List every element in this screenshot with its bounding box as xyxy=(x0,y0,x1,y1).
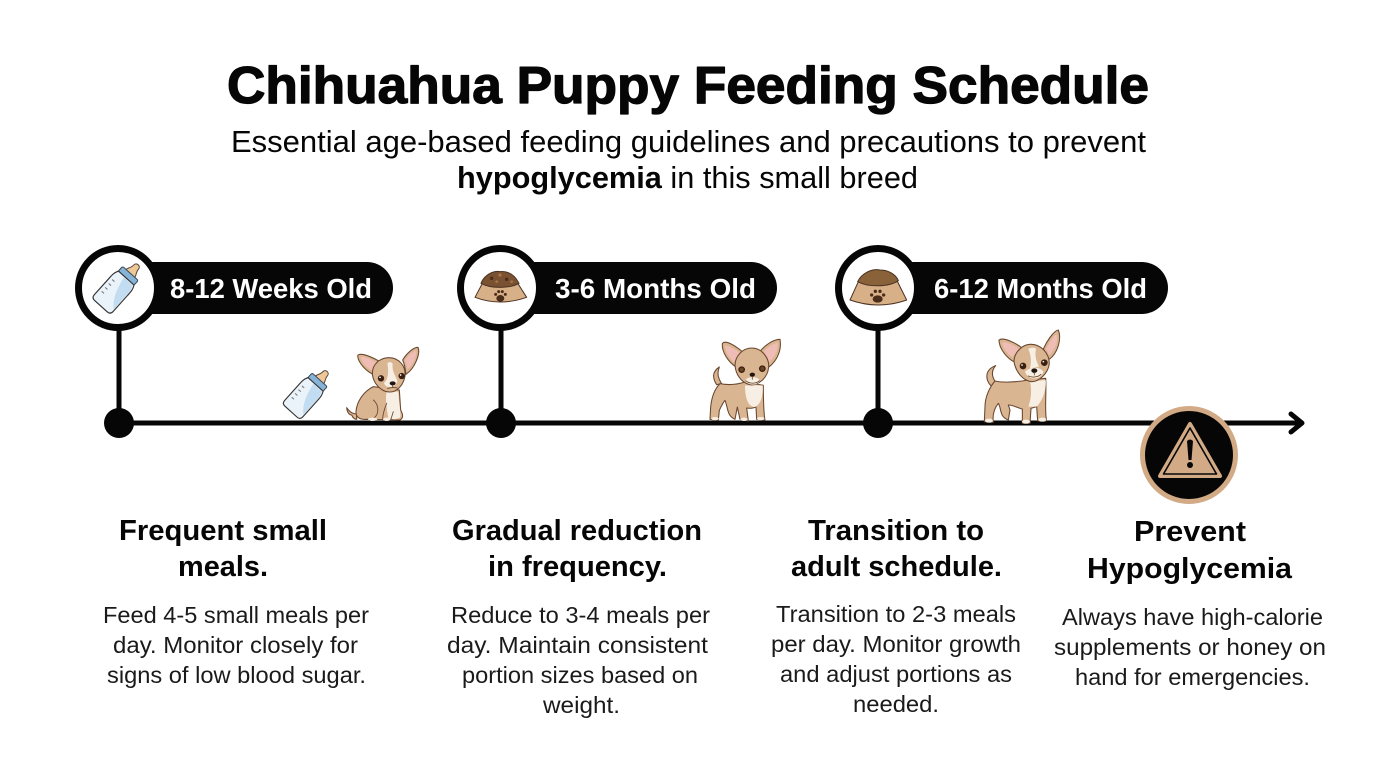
body text xyxy=(103,602,369,688)
heading: in frequency. xyxy=(488,551,667,583)
subtitle: Essential age-based feeding guidelines and precautions to prevent xyxy=(231,124,1146,159)
body text: Reduce to 3-4 meals per xyxy=(451,602,710,628)
subtitle: hypoglycemia in this small breed xyxy=(457,160,918,195)
heading: Hypoglycemia xyxy=(1087,553,1293,585)
icon: standing puppy, 6-12 months xyxy=(984,330,1060,424)
body text: Always have high-calorie xyxy=(1062,604,1323,630)
heading: meals. xyxy=(178,551,268,583)
milestone: 6-12 months xyxy=(838,248,1168,438)
body text xyxy=(447,602,710,718)
label: 6-12 months old: 6-12 Months Old xyxy=(934,273,1147,304)
icon: standing puppy, 3-6 months xyxy=(710,339,780,421)
label: 8-12 weeks old: 8-12 Weeks Old xyxy=(170,273,372,304)
heading xyxy=(791,515,1002,583)
heading xyxy=(1087,516,1293,585)
icon: sitting puppy xyxy=(347,347,419,421)
subtitle xyxy=(231,124,1146,195)
heading xyxy=(119,515,327,583)
label: 3-6 months old: 3-6 Months Old xyxy=(555,273,756,304)
icon: warning badge xyxy=(1142,408,1236,502)
heading: Transition to xyxy=(808,515,984,547)
body text: day. Maintain consistent xyxy=(447,632,709,658)
body text: signs of low blood sugar. xyxy=(107,662,366,688)
heading xyxy=(452,515,702,583)
body text: weight. xyxy=(542,692,620,718)
milestone: 8-12 weeks xyxy=(78,248,393,438)
column: prevent hypoglycemia xyxy=(1054,516,1326,690)
heading: Frequent small xyxy=(119,515,327,547)
body text: and adjust portions as xyxy=(780,661,1012,687)
heading: adult schedule. xyxy=(791,551,1002,583)
body text xyxy=(1054,604,1326,690)
body text: hand for emergencies. xyxy=(1075,664,1310,690)
body text xyxy=(771,601,1021,717)
icon: kibble bowl xyxy=(475,271,527,302)
body text: Feed 4-5 small meals per xyxy=(103,602,369,628)
body text: day. Monitor closely for xyxy=(113,632,358,658)
body text: per day. Monitor growth xyxy=(771,631,1021,657)
body text: needed. xyxy=(853,691,939,717)
timeline axis with arrow xyxy=(119,414,1302,432)
milestone: 3-6 months xyxy=(460,248,777,438)
body text: portion sizes based on xyxy=(462,662,698,688)
icon: small bottle on timeline xyxy=(282,363,336,420)
body text: Transition to 2-3 meals xyxy=(776,601,1016,627)
title: Chihuahua Puppy Feeding Schedule xyxy=(227,57,1149,115)
heading: Gradual reduction xyxy=(452,515,702,547)
column: frequent small meals xyxy=(103,515,369,688)
body text: supplements or honey on xyxy=(1054,634,1326,660)
heading: Prevent xyxy=(1134,516,1246,548)
icon: food bowl xyxy=(850,270,907,305)
column: transition to adult schedule xyxy=(771,515,1021,717)
column: gradual reduction xyxy=(447,515,710,718)
icon: baby bottle xyxy=(92,256,148,315)
